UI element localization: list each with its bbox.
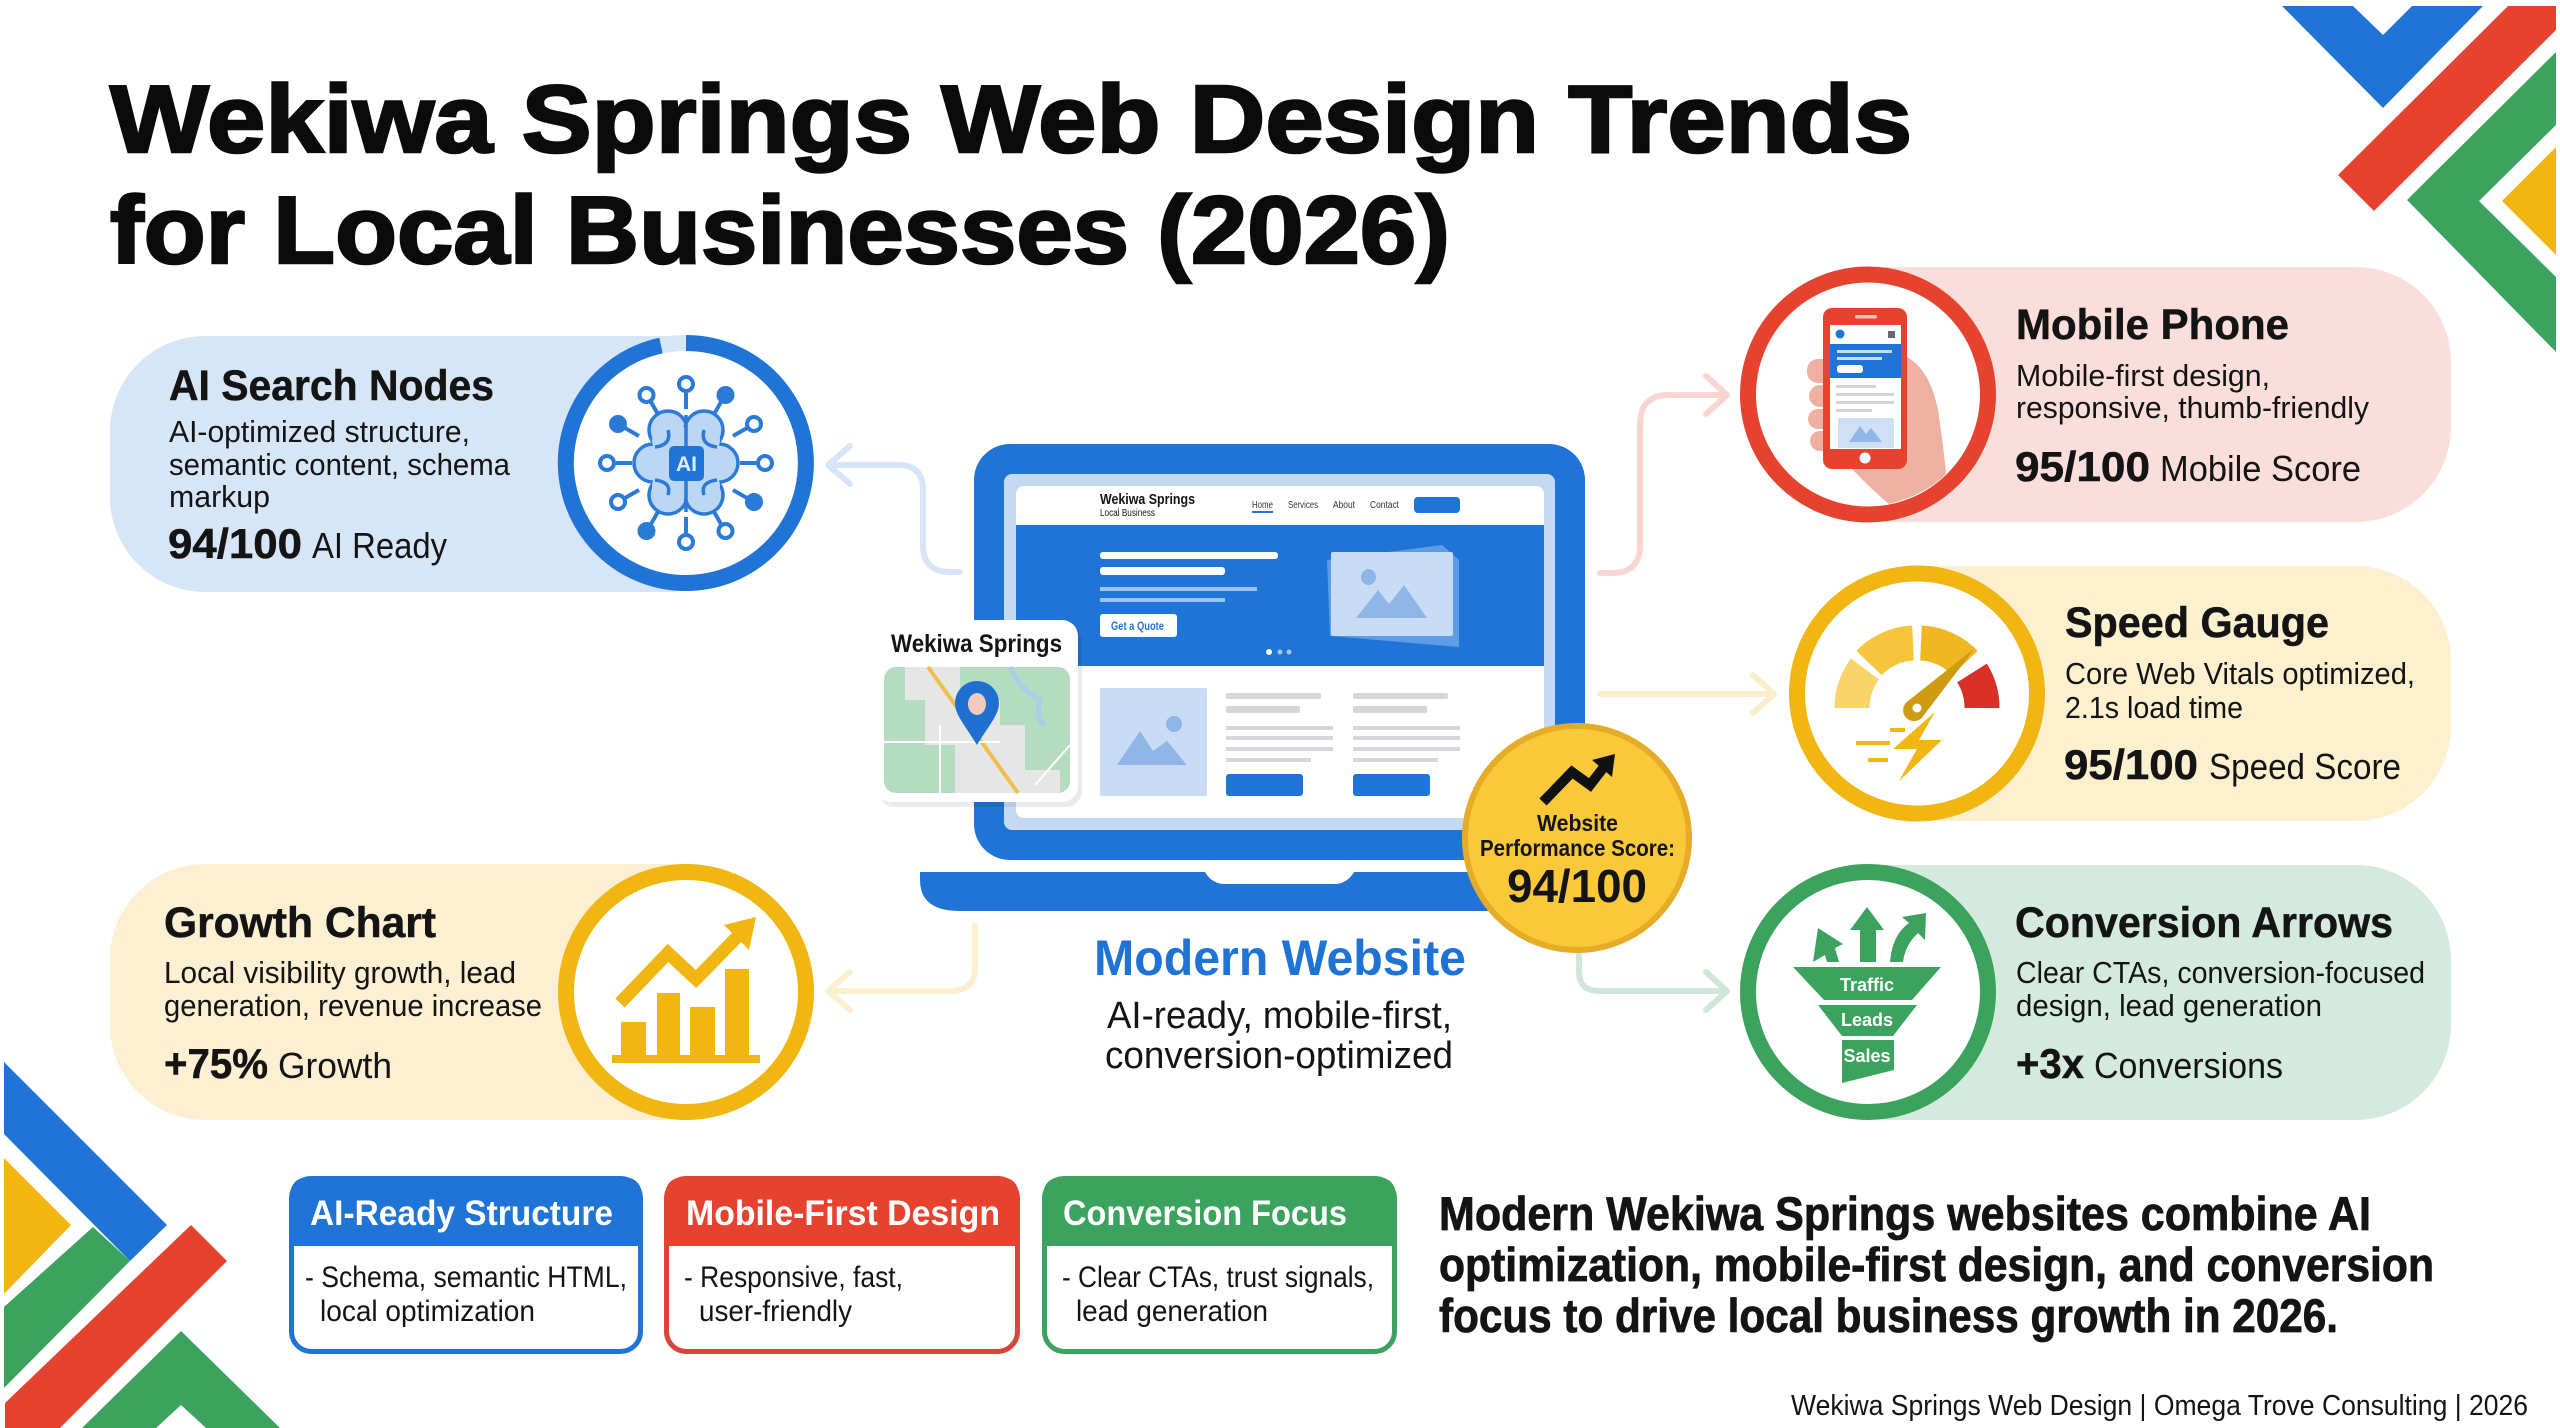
description: Growth Chart: Local visibility growth, lead [164,955,516,990]
score: 95/100 Speed Score [2064,741,2401,788]
summary text: focus to drive local business growth in 2026. [1439,1289,2338,1342]
card: AI-Ready Structure: - Schema, semantic HTML, [305,1261,627,1294]
icon: phone in hand [1748,274,1988,514]
website hero [1016,525,1544,666]
website page [1016,486,1544,818]
website header: About [1333,500,1355,511]
score: +75% Growth [164,1040,392,1087]
card: AI-Ready Structure: AI-Ready Structure [310,1194,613,1233]
description: Growth Chart [164,955,542,1023]
description: Growth Chart: generation, revenue increase [164,988,542,1023]
score: 95/100 Mobile Score [2015,443,2361,490]
text: modern website description: AI-ready, mobile-first, [1107,995,1452,1037]
card: Conversion Focus [1043,1177,1396,1352]
laptop base [920,872,1640,911]
bottom left corner decoration [4,1062,280,1428]
badge: website performance score [1465,726,1689,950]
icon: speed gauge with lightning bolt [1797,574,2037,814]
badge: website performance score: 94/100 [1507,860,1647,912]
card: Mobile-First Design: Mobile-First Design [686,1194,1000,1233]
icon: growth bar chart [566,872,806,1112]
score: 94/100 AI Ready [168,520,447,567]
description: AI Search Nodes: AI-optimized structure, [169,414,470,449]
website header: Wekiwa Springs [1100,491,1195,508]
text: modern website description: conversion-optimized [1105,1035,1453,1077]
card: Mobile-First Design [665,1177,1019,1352]
panel: Speed Gauge [1797,566,2451,821]
score: 95/100 Speed Score: Speed Score [2209,746,2401,787]
heading: Conversion Arrows: Conversion Arrows [2015,899,2393,947]
laptop screen bezel [1004,474,1555,830]
score: 95/100 Mobile Score: 95/100 [2015,443,2150,490]
description: Mobile Phone: responsive, thumb-friendly [2016,390,2369,425]
badge: website performance score: Performance Score: [1480,835,1675,861]
description: AI Search Nodes [169,414,511,514]
map card: Wekiwa Springs [875,620,1082,807]
score: 95/100 Mobile Score: Mobile Score [2160,448,2361,489]
score: +75% Growth: Growth [278,1045,392,1086]
text: modern website description [1105,995,1453,1077]
summary text: Modern Wekiwa Springs websites combine AI [1439,1187,2371,1240]
central laptop illustration [920,444,1640,911]
arrow: laptop to speed gauge [1600,675,1774,713]
summary text: optimization, mobile-first design, and conversion [1439,1238,2434,1291]
icon: AI brain with nodes [566,343,806,583]
icon: AI brain with nodes: AI [676,453,697,476]
description: Speed Gauge: Core Web Vitals optimized, [2065,656,2415,691]
card: Mobile-First Design: - Responsive, fast, [684,1261,903,1294]
score: 95/100 Speed Score: 95/100 [2064,741,2198,788]
website hero: Get a Quote [1111,619,1164,633]
website header: Contact [1370,500,1399,511]
panel: Mobile Phone [1748,267,2451,522]
website header [1100,491,1460,519]
panel: AI Search Nodes [110,336,806,592]
top right corner decoration [2282,6,2556,352]
heading: Mobile Phone: Mobile Phone [2016,301,2289,349]
website header: Local Business [1100,508,1155,519]
arrow: laptop to AI search nodes [828,446,960,572]
title [110,66,1912,284]
score: +75% Growth: +75% [164,1040,268,1087]
arrow: laptop to conversion arrows [1579,955,1727,1010]
icon: conversion funnel with arrows: Sales [1843,1046,1891,1066]
summary text [1439,1187,2434,1342]
title: for Local Businesses (2026) [110,177,1450,284]
description: Speed Gauge [2065,656,2415,725]
icon: conversion funnel with arrows [1748,872,1988,1112]
description: Conversion Arrows: design, lead generation [2016,988,2322,1023]
description: Conversion Arrows: Clear CTAs, conversion-focused [2016,955,2425,990]
icon: trending up arrow [1543,754,1615,802]
score: +3x Conversions: +3x [2016,1040,2085,1087]
description: Mobile Phone: Mobile-first design, [2016,358,2270,393]
description: Mobile Phone [2016,358,2369,425]
card: Conversion Focus: - Clear CTAs, trust signals, [1062,1261,1374,1294]
arrow: laptop to growth chart [828,926,975,1010]
heading: Growth Chart: Growth Chart [164,899,436,947]
icon: conversion funnel with arrows: Leads [1841,1010,1893,1030]
description: AI Search Nodes: semantic content, schema [169,447,511,482]
card: Conversion Focus: Conversion Focus [1063,1194,1347,1233]
heading: Modern Website: Modern Website [1094,930,1466,986]
website content cards [1100,688,1460,796]
website header: Services [1288,500,1318,511]
card: Conversion Focus: lead generation [1076,1295,1268,1328]
website header: Home [1252,500,1273,511]
badge: website performance score: Website [1537,810,1618,836]
score: 94/100 AI Ready: 94/100 [168,520,302,567]
panel: Growth Chart [110,864,806,1120]
heading: AI Search Nodes: AI Search Nodes [169,362,494,410]
score: 94/100 AI Ready: AI Ready [312,525,447,566]
description: Speed Gauge: 2.1s load time [2065,690,2243,725]
heading: Speed Gauge: Speed Gauge [2065,599,2329,647]
score: +3x Conversions: Conversions [2094,1045,2283,1086]
description: Conversion Arrows [2016,955,2425,1023]
panel: Conversion Arrows [1748,865,2451,1120]
description: AI Search Nodes: markup [169,479,270,514]
arrow: laptop to mobile phone [1600,376,1727,573]
card: AI-Ready Structure: local optimization [320,1295,535,1328]
title: Wekiwa Springs Web Design Trends [110,66,1912,173]
score: +3x Conversions [2016,1040,2283,1087]
map card: Wekiwa Springs: Wekiwa Springs [891,630,1062,658]
card: AI-Ready Structure [290,1177,642,1352]
card: Mobile-First Design: user-friendly [699,1295,852,1328]
laptop lid [974,444,1585,860]
icon: conversion funnel with arrows: Traffic [1840,975,1894,995]
